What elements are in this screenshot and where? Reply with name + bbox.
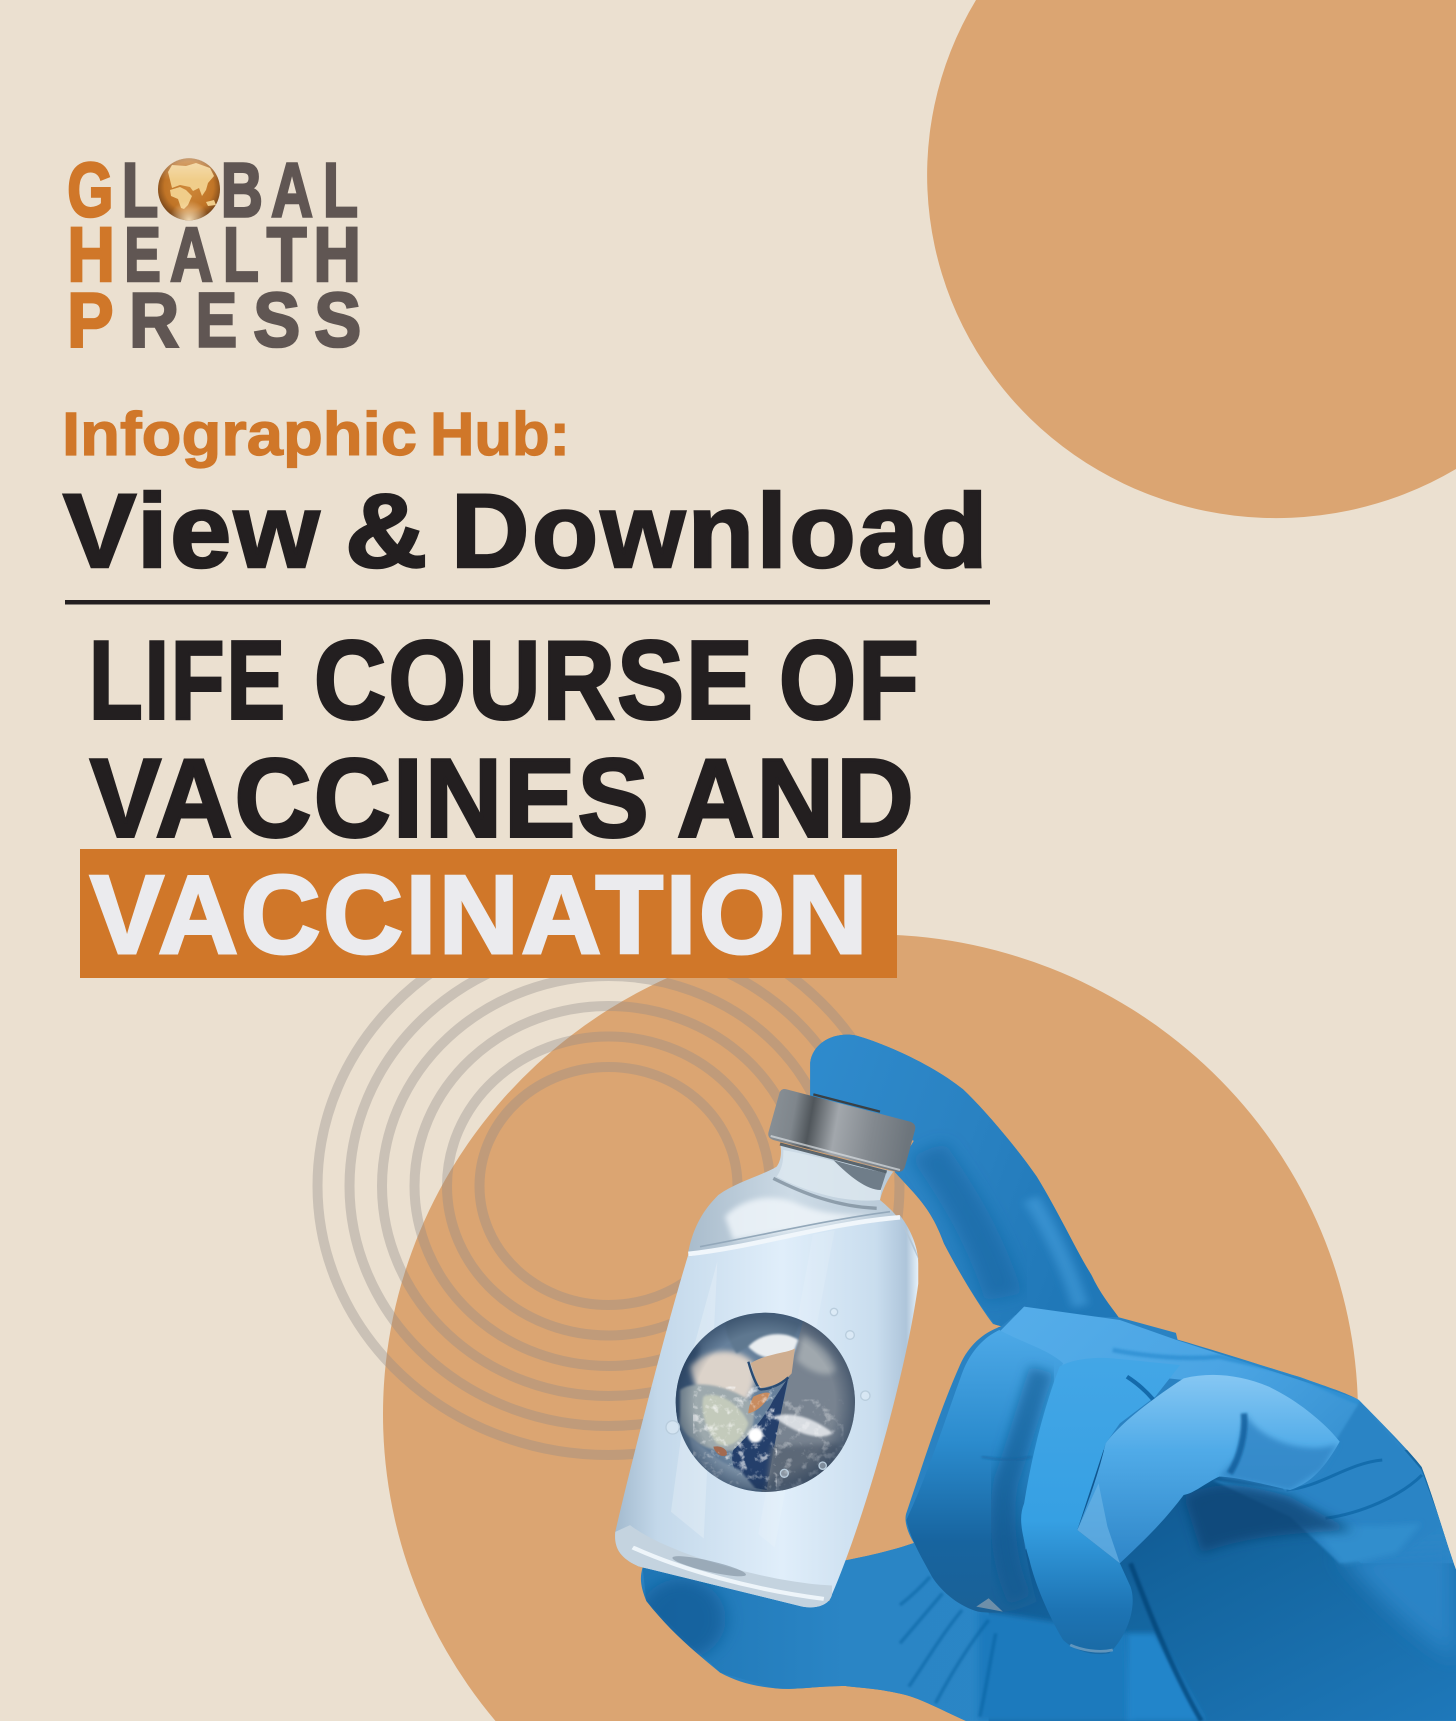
back of hand: [982, 1307, 1456, 1563]
logo row: HEALTH: L: [223, 212, 259, 298]
finger A: [906, 1330, 1063, 1613]
subtitle: Infographic Hub: Infographic: [62, 400, 417, 468]
logo row: HEALTH: A: [170, 212, 213, 298]
logo row: GLOBAL: [67, 148, 358, 234]
heading: View & Download: &: [345, 473, 430, 590]
logo: Global Health Press: [68, 158, 360, 348]
logo row: PRESS: P: [67, 278, 114, 364]
logo row: HEALTH: H: [313, 212, 361, 298]
finger C: [1077, 1375, 1340, 1563]
palm: [989, 1450, 1456, 1721]
title line: LIFE COURSE OF: COURSE: [314, 618, 755, 742]
logo row: HEALTH: E: [124, 212, 161, 298]
bubbles: [666, 1308, 870, 1477]
logo globe: [158, 158, 220, 220]
highlighted title: VACCINATION: VACCINATION: [90, 853, 870, 977]
logo row: PRESS: S: [314, 278, 361, 364]
logo row: PRESS: E: [196, 278, 237, 364]
logo row: PRESS: [67, 278, 361, 364]
concentric rings: [318, 917, 900, 1455]
thumb folds: [900, 1577, 996, 1717]
vial liquid body: [615, 1216, 918, 1607]
index finger and thumb: [638, 1035, 1146, 1721]
logo row: HEALTH: [67, 212, 361, 298]
Earth in vial: [673, 1310, 860, 1495]
photo: gloved hand holding vaccine vial with Earth: [615, 1030, 1456, 1721]
logo row: GLOBAL: B: [221, 148, 263, 234]
vaccine vial: [615, 1089, 919, 1607]
gloved hand: [638, 1030, 1456, 1721]
logo row: GLOBAL: G: [67, 148, 114, 234]
palm, knuckles and fingers: [900, 1307, 1456, 1721]
title line: VACCINES AND: AND: [677, 736, 916, 860]
heading: View & Download: View: [63, 473, 322, 590]
vial neck, shoulder and cap: [688, 1089, 919, 1260]
logo row: GLOBAL: A: [271, 148, 313, 234]
divider line: [65, 600, 990, 604]
logo row: GLOBAL: L: [323, 148, 358, 234]
subtitle: Infographic Hub: Hub:: [430, 400, 570, 468]
logo row: HEALTH: H: [67, 212, 115, 298]
logo row: HEALTH: T: [267, 212, 306, 298]
title line: LIFE COURSE OF: [89, 618, 921, 742]
decorative circle: top right: [927, 0, 1456, 518]
logo row: PRESS: R: [129, 278, 179, 364]
decorative circle: bottom: [383, 934, 1358, 1721]
title line: LIFE COURSE OF: OF: [779, 618, 921, 742]
title line: VACCINES AND: VACCINES: [90, 736, 651, 860]
title line: LIFE COURSE OF: LIFE: [89, 618, 287, 742]
logo row: PRESS: S: [253, 278, 300, 364]
subtitle: Infographic Hub: [62, 400, 570, 468]
heading: View & Download: [63, 473, 990, 590]
logo row: GLOBAL: L: [122, 148, 158, 234]
knuckle shading: [1212, 1400, 1441, 1563]
vial base: [615, 1525, 832, 1607]
finger B: [1021, 1358, 1180, 1654]
heading: View & Download: Download: [451, 473, 990, 590]
